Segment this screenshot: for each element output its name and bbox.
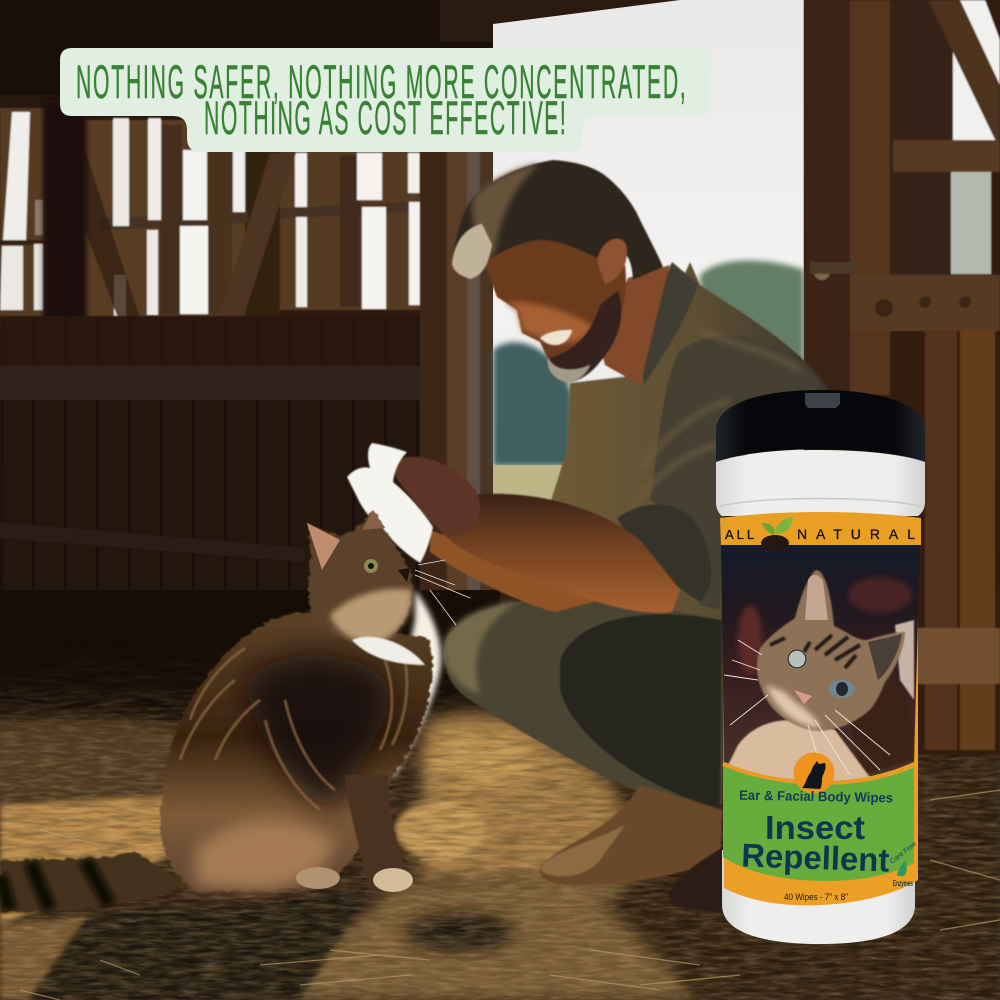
portrait: forehead stripes bbox=[770, 635, 860, 668]
portrait: whiskers bbox=[724, 640, 890, 780]
jar: wipe count: 40 Wipes - 7" x 8" bbox=[784, 892, 848, 902]
man: grey curl bbox=[452, 224, 492, 279]
loose straw strands bbox=[20, 790, 1000, 1000]
barn window panels bbox=[0, 108, 425, 366]
man: boots bbox=[540, 785, 722, 885]
man: sleeve cuff bbox=[617, 504, 711, 602]
cat: eye and nose bbox=[364, 559, 378, 573]
cat: ears bbox=[307, 523, 340, 570]
man: back arm bbox=[430, 530, 600, 612]
man bbox=[392, 160, 830, 912]
cat: body bbox=[160, 612, 433, 892]
jar: cat badge bbox=[794, 752, 834, 794]
cat: front leg bbox=[345, 775, 412, 892]
jar: product name: Insect bbox=[765, 809, 865, 846]
cat: whiskers bbox=[415, 560, 470, 625]
man: neck bbox=[600, 265, 670, 385]
portrait: nose bbox=[794, 690, 812, 704]
wipe cloth bbox=[347, 443, 433, 563]
jar: label photo bbox=[721, 545, 920, 781]
headline bubble bbox=[60, 48, 710, 152]
man: hand bbox=[392, 457, 480, 536]
man: ear bbox=[597, 239, 627, 284]
headline text bbox=[76, 55, 686, 144]
cat: dark chest shadow bbox=[245, 655, 392, 810]
jar: orange label body bbox=[722, 520, 918, 905]
straw texture bbox=[0, 640, 1000, 1000]
jar: all natural band bbox=[720, 512, 921, 551]
man: forearm bbox=[440, 494, 680, 613]
cat: white neck tuft bbox=[352, 637, 425, 665]
jar: brand mark: Care Free bbox=[889, 841, 918, 866]
man: face bbox=[484, 235, 626, 376]
man: hair bbox=[452, 160, 663, 280]
barn interior background bbox=[0, 0, 1000, 700]
jar: brand mark: Enzymes bbox=[893, 879, 913, 888]
jar: black lid bbox=[716, 390, 925, 462]
cat: head bbox=[307, 510, 412, 643]
window slits of daylight bbox=[3, 112, 30, 240]
cat: fur streaks bbox=[180, 648, 407, 810]
jar: product subtitle: Ear & Facial Body Wipes bbox=[739, 788, 893, 805]
cat: glow rim bbox=[385, 590, 441, 775]
man: trousers bbox=[444, 595, 725, 805]
doorway with sky, trees and field bbox=[493, 0, 804, 600]
man: collar bbox=[640, 262, 698, 385]
jar: all natural band: ALL bbox=[725, 527, 757, 542]
jar: all natural band: NATURAL bbox=[797, 526, 915, 542]
jar: product name bbox=[741, 809, 890, 879]
right barn wall and door bbox=[804, 0, 1000, 755]
man: beard bbox=[550, 290, 622, 382]
cat: lower belly light bbox=[195, 820, 335, 890]
barn rails and posts bbox=[0, 18, 493, 610]
diagonal beam bbox=[204, 153, 296, 366]
man: shirt torso bbox=[548, 262, 830, 620]
headline text: NOTHING SAFER, NOTHING MORE CONCENTRATED, bbox=[76, 55, 686, 108]
man: smile bbox=[540, 330, 572, 345]
cat bbox=[0, 510, 470, 913]
straw floor bbox=[0, 590, 1000, 1000]
headline text: NOTHING AS COST EFFECTIVE! bbox=[204, 91, 566, 144]
jar: green panel bbox=[723, 766, 914, 881]
man: shirt fold highlights bbox=[630, 330, 800, 510]
jar: product name: Repellent bbox=[741, 836, 890, 879]
jar: white base bbox=[722, 850, 915, 944]
jar: white cap ring bbox=[716, 450, 925, 516]
product jar bbox=[716, 390, 925, 944]
cat: tail rings bbox=[0, 860, 110, 910]
jar: cat portrait bbox=[724, 570, 914, 782]
jar: brand mark bbox=[889, 841, 918, 888]
cat: tail bbox=[0, 852, 190, 913]
portrait: eyes bbox=[787, 649, 807, 669]
